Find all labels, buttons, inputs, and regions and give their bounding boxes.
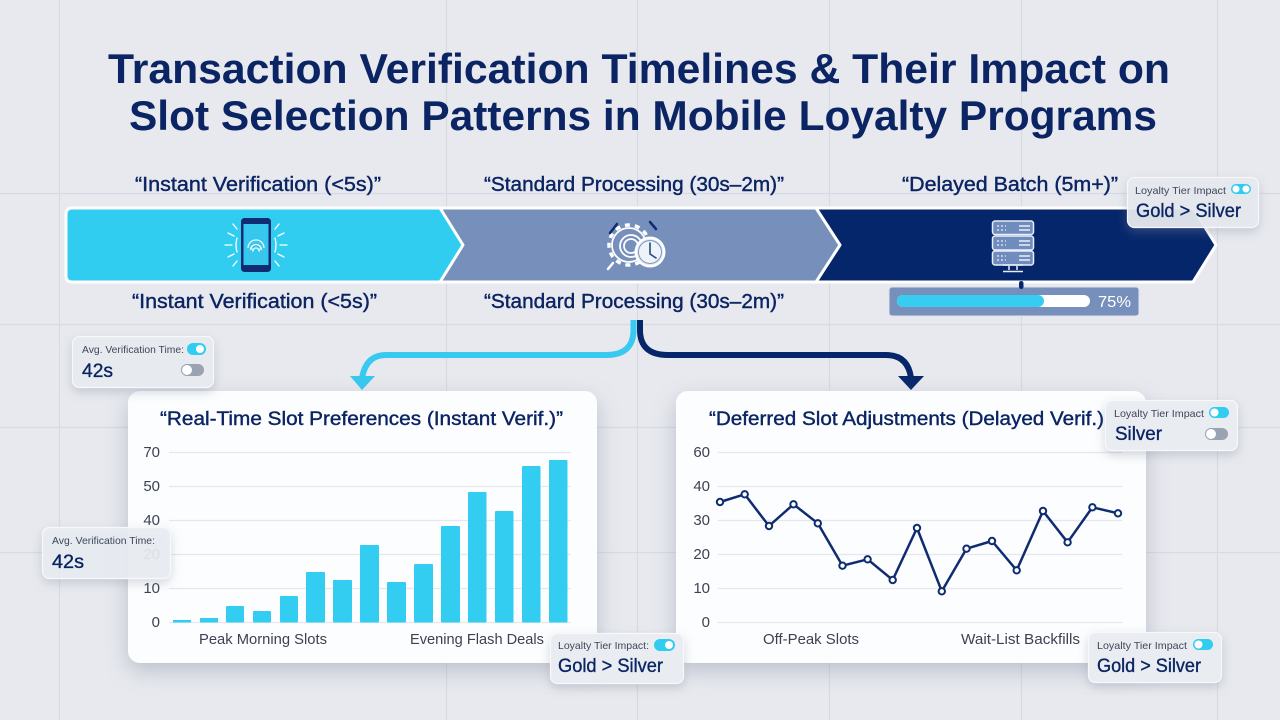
callout: loyalty tier top right — [1128, 178, 1258, 228]
y axis labels: 50 — [143, 478, 160, 495]
x axis labels: Off-Peak Slots — [763, 632, 859, 648]
callout: avg verification left — [42, 528, 170, 578]
toggle off — [181, 364, 204, 376]
y axis labels: 10 — [143, 580, 160, 597]
toggle on — [654, 639, 675, 651]
stage 3 chevron — [800, 208, 1216, 282]
bar chart — [173, 460, 568, 622]
callout: avg verification left: 42s — [52, 552, 84, 573]
callout: loyalty tier bottom right: Loyalty Tier Impact — [1097, 640, 1187, 652]
toggle on — [187, 343, 206, 355]
toggle off — [1205, 428, 1228, 440]
toggle — [1231, 184, 1251, 194]
stage 2 chevron — [420, 208, 840, 282]
toggle on — [1193, 639, 1213, 650]
callout: loyalty tier silver — [1106, 400, 1238, 450]
icon: phone with fingerprint — [225, 218, 287, 272]
y axis labels: 10 — [693, 580, 710, 597]
x axis labels: Evening Flash Deals — [410, 632, 544, 648]
callout: loyalty tier silver: Silver — [1115, 424, 1163, 445]
process chevron band — [66, 208, 1216, 282]
progress bar 75% — [889, 281, 1139, 316]
title — [108, 45, 1170, 139]
chart heading: “Deferred Slot Adjustments (Delayed Verif.) — [709, 408, 1104, 430]
y axis labels: 0 — [702, 614, 710, 631]
callout: avg verification top: Avg. Verification Time: — [82, 344, 184, 356]
callout: loyalty tier top right: Loyalty Tier Impact — [1135, 185, 1226, 197]
panel: real-time slot preferences — [128, 391, 597, 663]
y axis labels: 30 — [693, 512, 710, 529]
line chart — [717, 491, 1121, 594]
bottom stage labels: “Instant Verification (<5s)” — [132, 291, 377, 313]
x axis labels — [763, 632, 1080, 648]
toggle on — [1209, 407, 1229, 418]
y axis labels: 60 — [693, 444, 710, 461]
y axis labels: 40 — [693, 478, 710, 495]
top stage labels: “Delayed Batch (5m+)” — [902, 174, 1118, 196]
panel: deferred slot adjustments — [676, 391, 1146, 663]
x axis labels: Peak Morning Slots — [199, 632, 327, 648]
callout: loyalty tier bottom centre: Loyalty Tier Impact: — [558, 640, 649, 652]
top stage labels — [0, 170, 1120, 198]
callout: avg verification top: 42s — [82, 361, 113, 382]
arrow: to deferred chart — [640, 320, 924, 390]
progress bar 75%: 75% — [1098, 294, 1131, 311]
callout: loyalty tier bottom centre — [550, 634, 684, 684]
callout: loyalty tier bottom right — [1088, 632, 1222, 682]
callout: avg verification top — [72, 336, 214, 388]
y axis labels: 20 — [693, 546, 710, 563]
callout: loyalty tier bottom centre: Gold > Silver — [558, 656, 664, 677]
y axis labels: 40 — [143, 512, 160, 529]
callout: avg verification left: Avg. Verification Time: — [52, 535, 155, 547]
callout: loyalty tier bottom right: Gold > Silver — [1097, 656, 1202, 677]
x axis labels — [199, 632, 544, 648]
top stage labels: “Standard Processing (30s–2m)” — [484, 174, 784, 196]
y axis labels: 20 — [143, 546, 160, 563]
bottom stage labels — [132, 291, 784, 313]
y axis labels: 0 — [152, 614, 160, 631]
callout: loyalty tier top right: Gold > Silver — [1136, 201, 1242, 222]
arrow: to real-time chart — [350, 320, 634, 390]
y axis labels — [693, 444, 710, 631]
icon: server rack — [992, 221, 1034, 272]
stage 1 chevron — [66, 208, 463, 282]
x axis labels: Wait-List Backfills — [961, 632, 1080, 648]
title: Transaction Verification Timelines & Their Impact on — [108, 45, 1170, 92]
y axis labels — [143, 444, 160, 631]
chart heading: “Real-Time Slot Preferences (Instant Verif.)” — [160, 408, 563, 430]
top stage labels: “Instant Verification (<5s)” — [135, 174, 381, 196]
y axis labels: 70 — [143, 444, 160, 461]
icon: gear and clock — [608, 222, 666, 269]
bottom stage labels: “Standard Processing (30s–2m)” — [484, 291, 784, 313]
title: Slot Selection Patterns in Mobile Loyalty Programs — [129, 92, 1157, 139]
callout: loyalty tier silver: Loyalty Tier Impact — [1114, 408, 1204, 420]
